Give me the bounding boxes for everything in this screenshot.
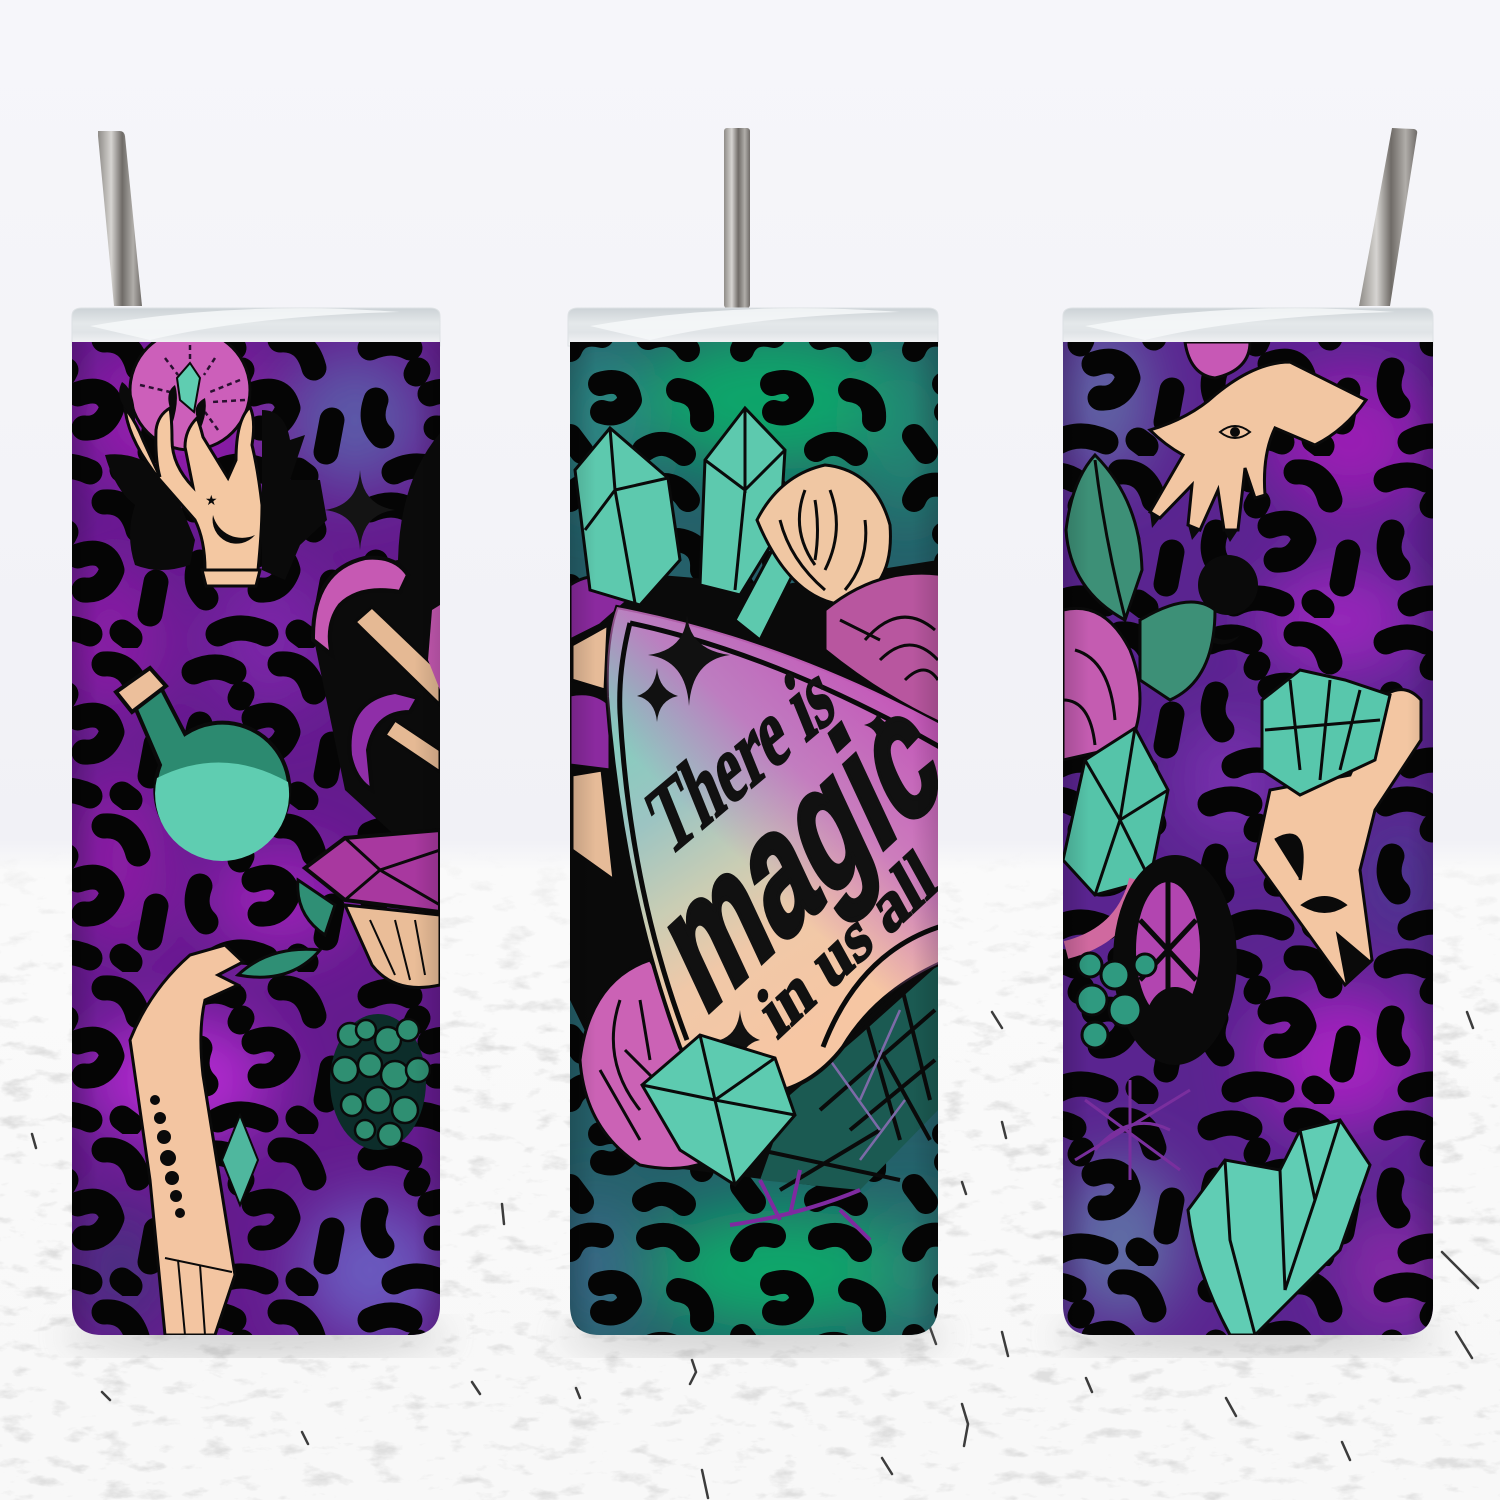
finger nails: [119, 382, 206, 430]
crystal left: [575, 428, 680, 605]
mushroom cap lower: [352, 694, 415, 786]
green leaves lower: [238, 880, 335, 977]
pink mushroom edge: [428, 605, 440, 690]
tumbler shadows: [61, 1318, 1443, 1354]
green bubbles: [1077, 953, 1156, 1048]
planchette text: There is: [636, 636, 846, 878]
green flowers: [330, 1014, 430, 1150]
pink rose lower: [578, 962, 698, 1170]
hand top right: [1150, 362, 1366, 542]
crystal lower shard: [736, 550, 792, 638]
straw right: [1359, 128, 1417, 306]
small crystal: [177, 363, 200, 412]
black mushroom mass: [312, 433, 440, 840]
moon tattoo: [213, 515, 255, 544]
planchette: [607, 607, 964, 1095]
crystal ball: [130, 330, 250, 450]
leaf: [1066, 455, 1142, 620]
hand left top: [119, 382, 262, 586]
web: [1075, 1080, 1190, 1180]
mushroom stem lower: [387, 722, 438, 770]
black foliage behind hand: [105, 410, 327, 580]
peach stripes left: [572, 625, 614, 880]
planchette text: magic: [637, 646, 964, 1051]
wheel purple centre: [1136, 882, 1205, 1063]
pink arc near wheel: [1066, 880, 1138, 950]
black backing: [570, 560, 938, 1190]
pink gem: [305, 830, 440, 912]
crystal center: [700, 408, 785, 595]
stars on planchette: [637, 615, 892, 1065]
peach rose: [757, 465, 890, 605]
body center: [565, 330, 964, 1340]
straw left: [98, 131, 142, 306]
tumbler right: [1023, 308, 1483, 1370]
black wheel: [1113, 855, 1237, 1065]
moon phases on arm: [150, 1095, 185, 1218]
pink flower top: [1185, 342, 1250, 378]
star tattoos: ★: [205, 493, 218, 509]
teal crystal mid: [1063, 728, 1168, 895]
peach flower: [345, 905, 440, 988]
tumbler center: [565, 308, 964, 1340]
lid left: [72, 308, 440, 346]
web foliage: [760, 960, 938, 1190]
pink rose upper: [826, 574, 938, 720]
purple mushroom caps: [570, 576, 624, 768]
mushroom stem upper: [355, 607, 440, 705]
pink rose: [1063, 608, 1140, 760]
lid center: [568, 308, 938, 346]
background wall and floor: [0, 886, 1500, 1500]
thorny branches: [730, 1170, 870, 1240]
tumbler left: [60, 308, 440, 1340]
bouquet hand: [1255, 670, 1421, 985]
four-point star: [325, 470, 395, 550]
flask: [116, 668, 289, 861]
planchette inner line: [620, 623, 945, 1047]
planchette text: [636, 636, 964, 1053]
teal gem: [642, 1035, 795, 1185]
body left: [60, 330, 440, 1340]
lid right: [1063, 308, 1433, 346]
straw center: [724, 128, 750, 308]
green leaves mid: [1140, 602, 1215, 700]
mushroom cap upper: [313, 558, 408, 655]
body right: [1023, 310, 1483, 1370]
cuff: [202, 570, 260, 586]
floor cracks: [32, 1012, 1478, 1498]
crystal pendant: [222, 1115, 258, 1205]
crystal heart: [1188, 1120, 1370, 1335]
lower arm and hand: [130, 945, 243, 1335]
moon and small star: [1198, 555, 1258, 645]
planchette text: in us all: [746, 834, 947, 1053]
